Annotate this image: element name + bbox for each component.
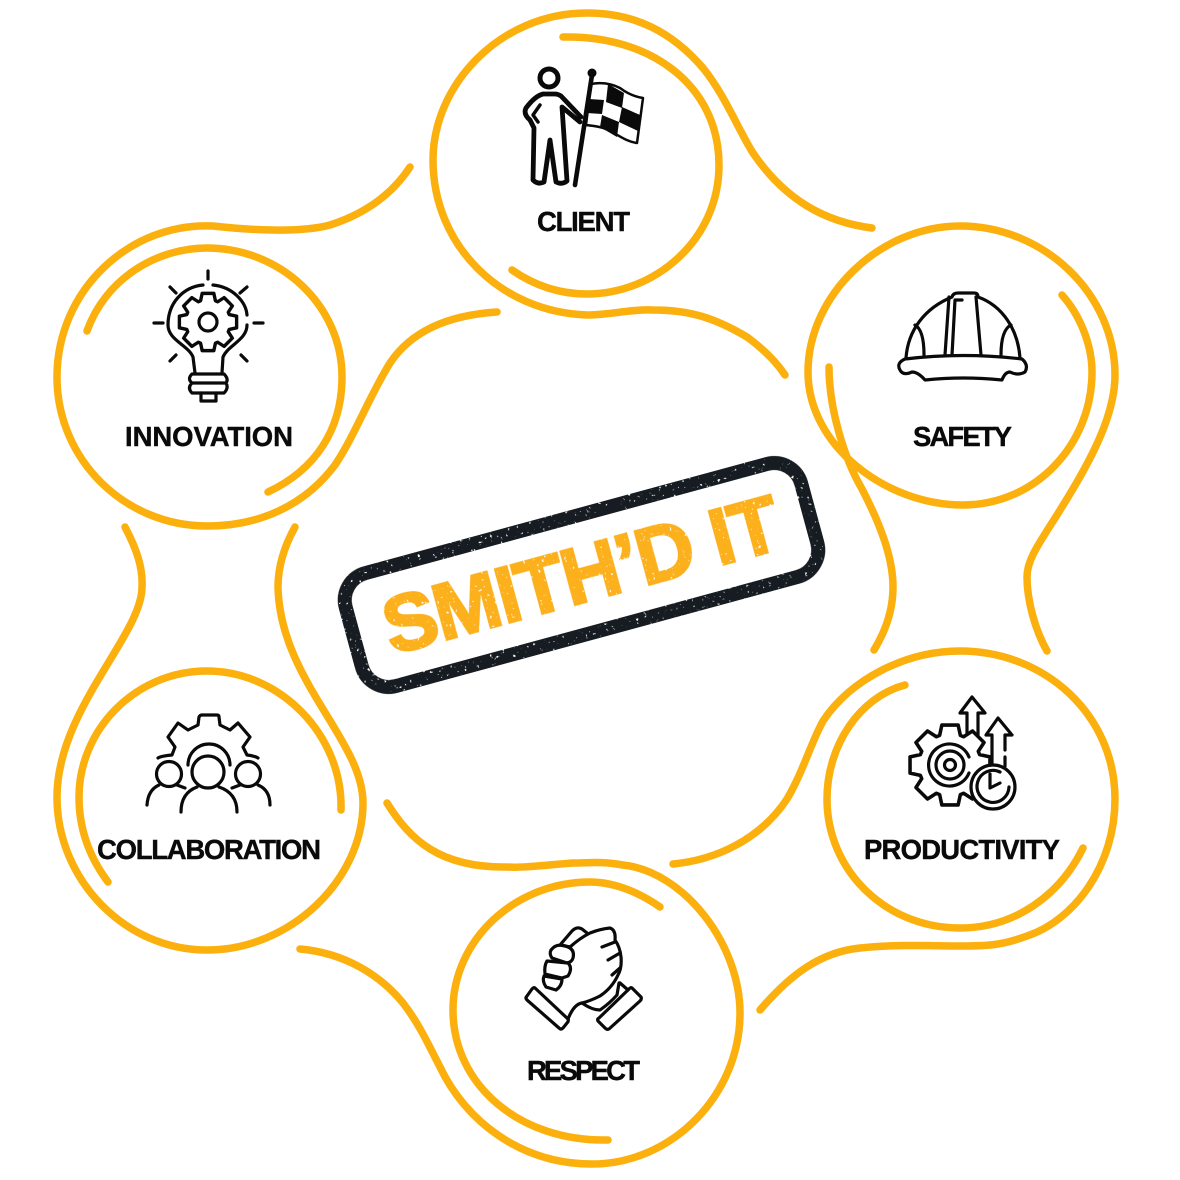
panel: client ring: [433, 13, 872, 375]
label: productivity: PRODUCTIVITY: [864, 834, 1060, 865]
icon: team with gear: [147, 715, 270, 812]
icon: handshake: [526, 928, 641, 1029]
panel: innovation ring: [57, 167, 497, 526]
label: collaboration: COLLABORATION: [97, 834, 321, 865]
panel: safety ring: [808, 226, 1115, 651]
stamp border: [338, 457, 825, 693]
label: safety: SAFETY: [913, 421, 1012, 452]
stamp: smith'd it: [338, 457, 825, 693]
label: respect: RESPECT: [527, 1055, 640, 1086]
panel: respect ring: [300, 803, 740, 1164]
panel: collaboration ring: [57, 527, 363, 950]
icon: hard hat: [899, 293, 1026, 380]
stamp text: SMITH’D IT: [373, 478, 790, 671]
label: client: CLIENT: [537, 206, 630, 237]
panel: productivity ring: [673, 651, 1115, 1010]
icon: gears with clock and arrows: [910, 697, 1015, 809]
icon: light bulb with gear: [154, 271, 263, 401]
icon: person with checkered flag: [525, 68, 643, 185]
label: innovation: INNOVATION: [125, 421, 293, 452]
